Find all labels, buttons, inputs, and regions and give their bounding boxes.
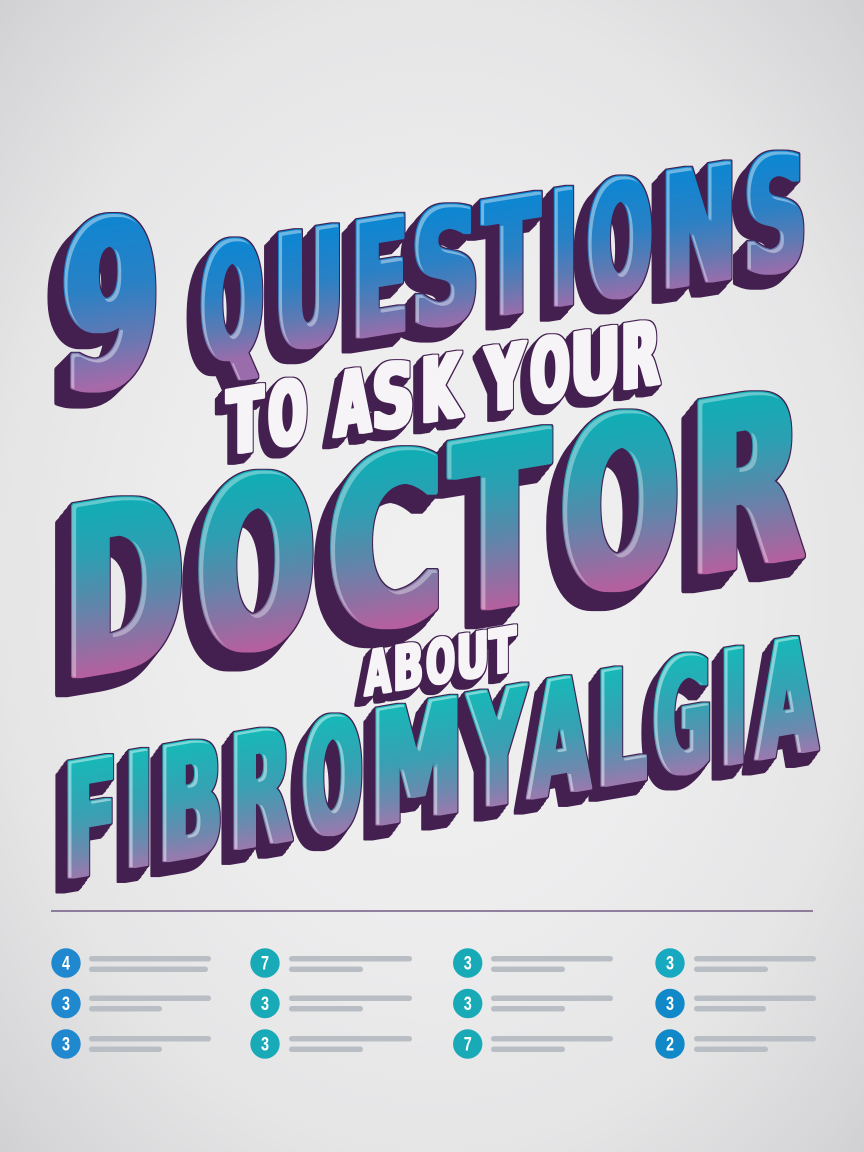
item 6: 3 xyxy=(261,1034,269,1056)
title numeral: 9: 9 xyxy=(61,166,160,446)
title line: ABOUT xyxy=(365,614,516,711)
item 5: 3 xyxy=(261,994,269,1015)
column 1 xyxy=(51,948,211,1059)
title line: TO ASK YOUR: O xyxy=(531,317,569,425)
title line: DOCTOR: O xyxy=(197,421,314,711)
item 12: 2 xyxy=(666,1034,674,1056)
title line: FIBROMYALGIA: I xyxy=(126,718,151,905)
column 2 xyxy=(250,948,412,1059)
column 3 xyxy=(453,948,613,1059)
title line: FIBROMYALGIA: O xyxy=(303,682,361,875)
title line: ABOUT: O xyxy=(426,625,455,700)
title line: QUESTIONS: I xyxy=(552,156,575,343)
title line: FIBROMYALGIA: F xyxy=(64,724,116,916)
title line: FIBROMYALGIA: I xyxy=(721,616,746,803)
question list xyxy=(51,948,816,1059)
item 3 xyxy=(51,1029,211,1059)
title line: DOCTOR: O xyxy=(561,361,678,650)
title line: QUESTIONS: S xyxy=(744,119,806,313)
title line: QUESTIONS xyxy=(201,119,806,400)
item 9 xyxy=(453,1029,613,1059)
item 10: 3 xyxy=(666,954,674,974)
title line: FIBROMYALGIA: A xyxy=(529,643,589,836)
title line: TO ASK YOUR: Y xyxy=(485,324,525,433)
title xyxy=(61,119,816,916)
title line: DOCTOR: T xyxy=(452,383,547,669)
title line: FIBROMYALGIA: M xyxy=(371,665,462,863)
title line: DOCTOR: D xyxy=(64,443,183,733)
title line: FIBROMYALGIA: B xyxy=(159,706,222,899)
item 4 xyxy=(250,948,412,978)
item 8 xyxy=(453,989,613,1018)
item 5 xyxy=(250,989,412,1018)
title line: DOCTOR: R xyxy=(690,340,802,629)
item 11: 3 xyxy=(666,994,674,1015)
title line: QUESTIONS: T xyxy=(484,162,538,354)
item 10 xyxy=(655,948,816,978)
title line: QUESTIONS: U xyxy=(274,193,343,388)
title line: FIBROMYALGIA: G xyxy=(654,622,711,814)
title line: ABOUT: U xyxy=(457,619,489,695)
item 11 xyxy=(655,989,816,1018)
title line: ABOUT: A xyxy=(365,636,391,711)
column 4 xyxy=(655,948,816,1059)
title line: DOCTOR: C xyxy=(328,400,442,689)
title line: QUESTIONS: O xyxy=(588,144,651,338)
title line: ABOUT: T xyxy=(489,614,516,689)
title line: TO ASK YOUR: T xyxy=(228,367,263,475)
title line: ABOUT: B xyxy=(393,630,423,706)
title line: QUESTIONS: E xyxy=(352,183,407,375)
title line: FIBROMYALGIA: L xyxy=(597,633,645,824)
title line: TO ASK YOUR: S xyxy=(373,342,413,451)
item 12 xyxy=(655,1029,816,1059)
item 1 xyxy=(51,948,211,978)
title line: TO ASK YOUR: O xyxy=(269,360,306,469)
title line: QUESTIONS: N xyxy=(662,130,735,326)
title line: TO ASK YOUR: U xyxy=(571,308,620,419)
item 1: 4 xyxy=(62,954,70,974)
item 3: 3 xyxy=(62,1034,70,1056)
item 7 xyxy=(453,948,613,978)
item 7: 3 xyxy=(464,954,472,974)
title line: TO ASK YOUR: R xyxy=(622,302,659,410)
item 6 xyxy=(250,1029,412,1059)
title line: FIBROMYALGIA: R xyxy=(230,694,291,887)
title line: TO ASK YOUR xyxy=(228,302,659,475)
title line: TO ASK YOUR: A xyxy=(335,349,371,458)
title line: TO ASK YOUR: K xyxy=(422,334,462,443)
item 8: 3 xyxy=(464,994,472,1015)
item 4: 7 xyxy=(261,954,269,974)
title line: FIBROMYALGIA: Y xyxy=(468,654,525,846)
item 2: 3 xyxy=(62,994,70,1015)
item 2 xyxy=(51,989,211,1018)
title line: QUESTIONS: Q xyxy=(201,206,262,400)
item 9: 7 xyxy=(464,1034,472,1056)
title line: FIBROMYALGIA xyxy=(64,604,816,916)
title line: DOCTOR xyxy=(64,340,802,733)
title line: QUESTIONS: S xyxy=(412,171,478,366)
